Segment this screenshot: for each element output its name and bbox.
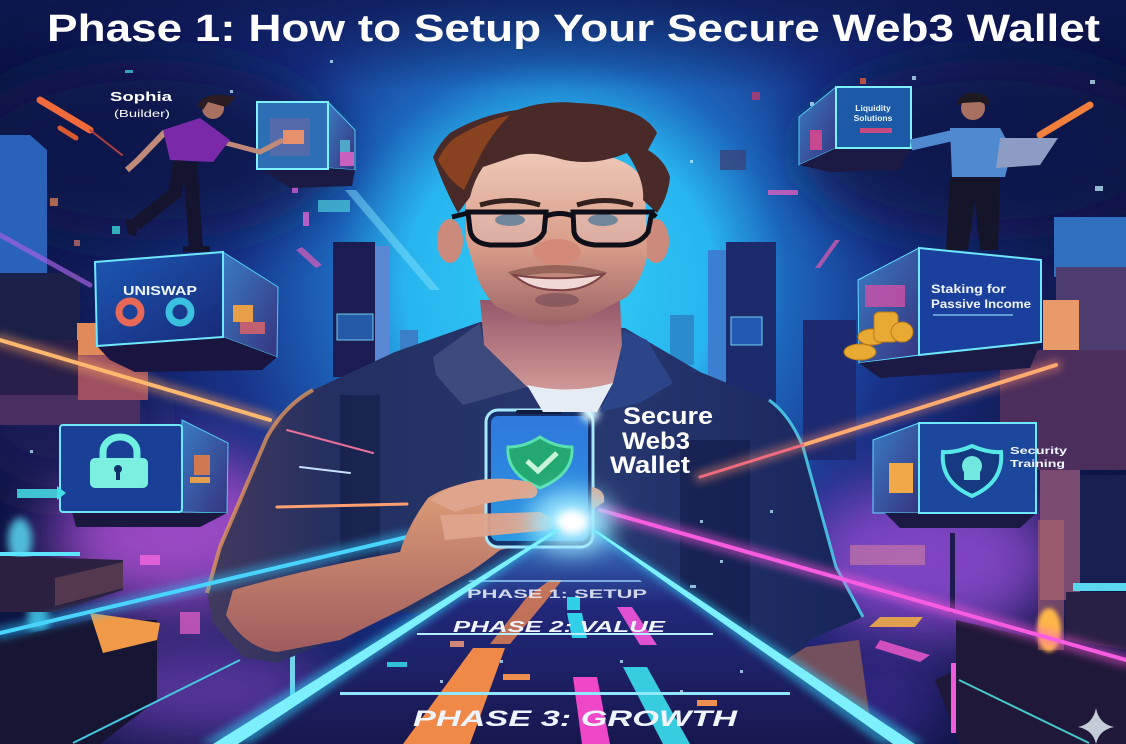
staking label: Staking for [931,284,1007,296]
staking label: Passive Income [931,299,1031,311]
nose [533,239,581,265]
Sophia label: (Builder) [114,108,170,120]
arm left [911,135,955,145]
t-shirt [527,383,613,412]
uniswap label: UNISWAP [123,283,197,298]
road phase labels: PHASE 1: SETUP [467,587,647,601]
arms [127,132,165,170]
right forearm [770,640,869,744]
icon: skull shield [943,446,1001,496]
collar left [433,323,527,405]
hair [957,93,990,106]
head [433,102,670,325]
security training label [1010,445,1067,470]
Sophia label [110,89,173,120]
cube: top right title [799,87,911,172]
cube: top right title: Solutions [854,113,893,123]
road [215,530,915,744]
hand fingers on phone [430,479,604,540]
neon light beams [0,100,1126,660]
road phase labels [413,587,739,731]
Sophia label: Sophia [110,89,173,104]
hair [433,102,670,213]
face [466,152,647,325]
neck [480,300,622,393]
arrow: cyan tag [17,486,66,500]
moustache shadow [508,265,606,278]
chin stubble [535,293,579,307]
staking label [931,284,1031,311]
hair [197,95,236,110]
glasses [452,212,656,245]
torso and sleeve [207,322,863,665]
shirt [950,128,1012,177]
icon: gold coins [844,312,913,360]
lower right blocks [850,520,1126,744]
city skyline right [670,217,1126,600]
security training label: Security [1010,445,1067,457]
forearm and hand [226,479,555,652]
logo: orange swirl [119,301,141,323]
collar right [600,330,673,412]
city skyline left [0,135,440,425]
phone label: Wallet [610,452,690,479]
head [202,97,224,119]
ears [437,219,669,263]
legs [136,160,180,224]
cube: lock [60,420,228,527]
shirt [163,118,230,162]
cube: top left circuit [257,102,355,188]
phone [430,410,604,547]
title: Phase 1: How to Setup Your Secure Web3 Wallet [47,8,1100,50]
trousers [946,177,1000,250]
road edge beams [200,530,925,744]
cube: security training [873,423,1067,528]
logo: blue swirl [169,301,191,323]
security training label: Training [1010,458,1065,470]
cube: staking [844,248,1041,378]
eyes [495,214,618,226]
head [961,96,985,120]
cube: Uniswap [95,252,278,372]
figure: Sophia [125,95,283,252]
eyebrows [480,200,633,205]
phone label: Web3 [622,428,690,455]
cube: top right title: Liquidity [855,103,891,113]
sparkle [1078,708,1114,744]
smile [514,274,604,290]
laptop [996,138,1058,168]
icon: green shield with check [508,437,572,488]
phone label [610,403,713,479]
phone glow [530,404,614,552]
hair highlight [438,115,510,190]
road phase labels: PHASE 3: GROWTH [413,706,739,731]
phone label: Secure [623,403,713,430]
icon: padlock [90,437,148,488]
figure: man with laptop [911,93,1058,250]
lower left blocks [0,518,295,744]
road phase labels: PHASE 2: VALUE [453,619,667,636]
